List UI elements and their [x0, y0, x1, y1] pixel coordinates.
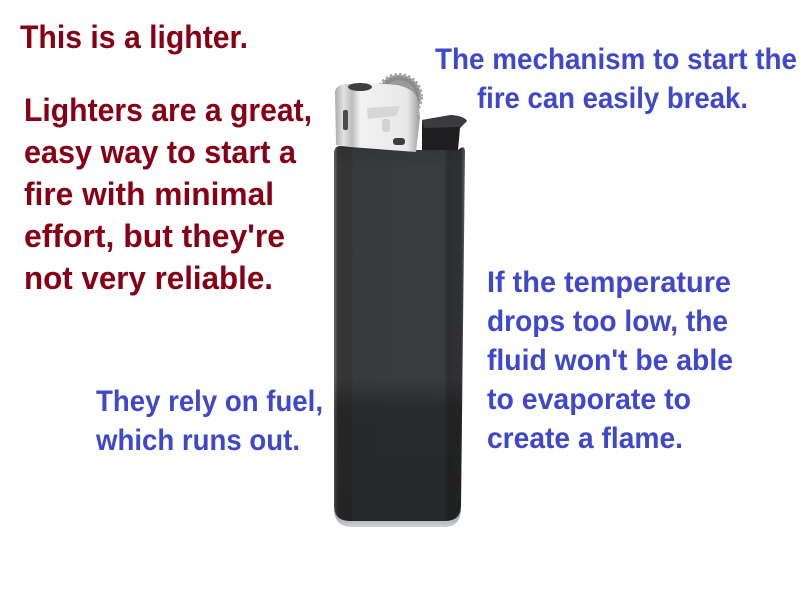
text block: lighters are easy but unreliable — [24, 92, 312, 296]
callout: temperature: fluid won't be able — [487, 344, 733, 377]
lighter body — [334, 146, 465, 521]
text block: lighters are easy but unreliable: easy way to start a — [24, 134, 296, 170]
text block: lighters are easy but unreliable: effort, but they're — [24, 218, 285, 254]
text block: lighters are easy but unreliable: fire with minimal — [24, 176, 274, 212]
spark wheel — [377, 75, 421, 119]
callout: fuel runs out: They rely on fuel, — [96, 385, 323, 418]
text block: lighters are easy but unreliable: not very reliable. — [24, 260, 273, 296]
fuel lever — [422, 115, 467, 150]
callout: mechanism can break: fire can easily break. — [477, 82, 748, 115]
lighter base — [334, 510, 461, 527]
text block: lighters are easy but unreliable: Lighters are a great, — [24, 92, 312, 128]
callout: temperature: drops too low, the — [487, 305, 728, 338]
callout: fuel runs out — [95, 385, 323, 457]
icon: lighter — [334, 75, 467, 527]
callout: mechanism can break — [435, 43, 797, 115]
callout: temperature: create a flame. — [487, 422, 683, 455]
callout: temperature: to evaporate to — [487, 383, 691, 416]
chrome hood — [335, 83, 420, 152]
callout: fuel runs out: which runs out. — [95, 424, 300, 457]
callout: temperature: If the temperature — [487, 266, 731, 299]
title: This is a lighter. — [20, 19, 248, 55]
callout: temperature — [487, 266, 733, 455]
